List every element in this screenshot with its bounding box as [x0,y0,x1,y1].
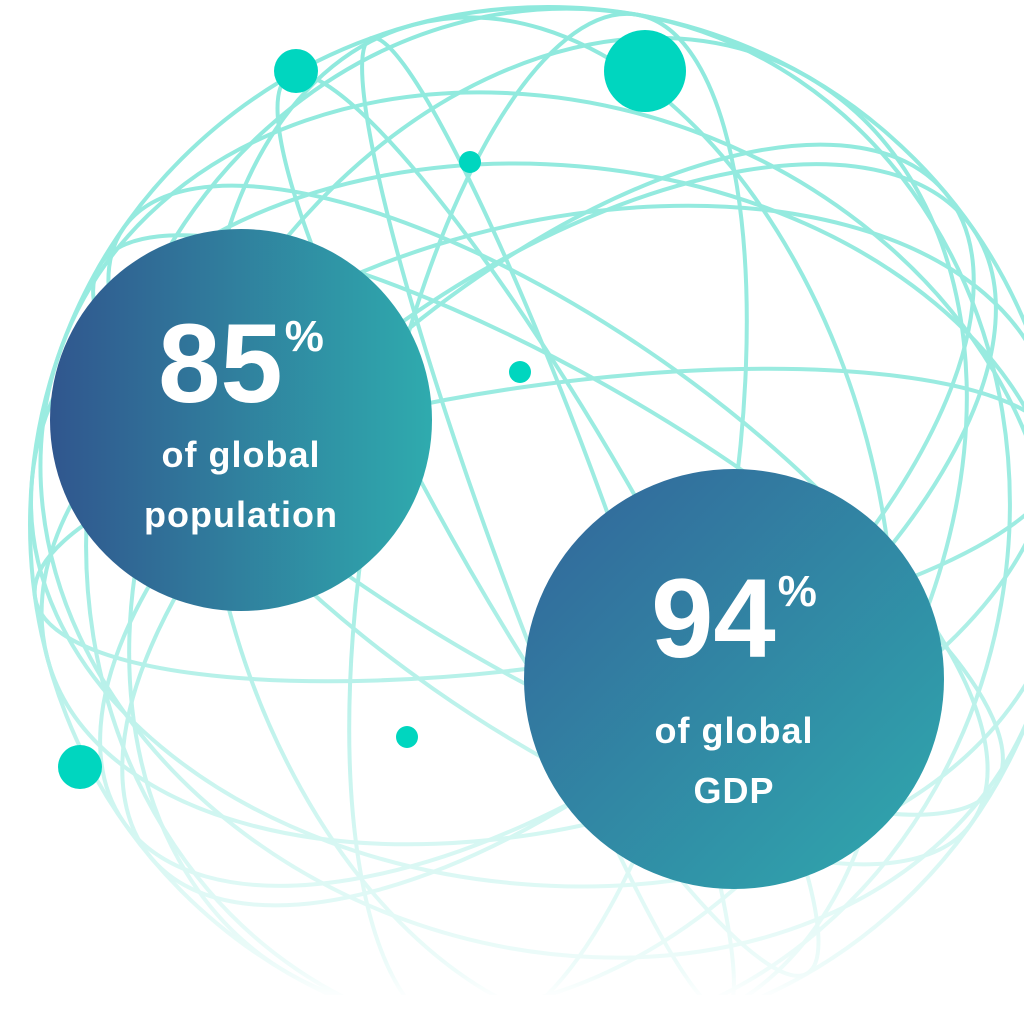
label: of global [654,710,813,751]
label: population [144,494,338,535]
label: of global [162,434,320,475]
label: GDP [693,770,774,811]
stat: 85% of global population [50,229,432,611]
label [654,710,813,811]
value 85%: 85% [158,301,324,426]
label [144,434,338,535]
value 94%: 94% [651,556,817,681]
stat: 94% of global GDP [524,469,944,889]
